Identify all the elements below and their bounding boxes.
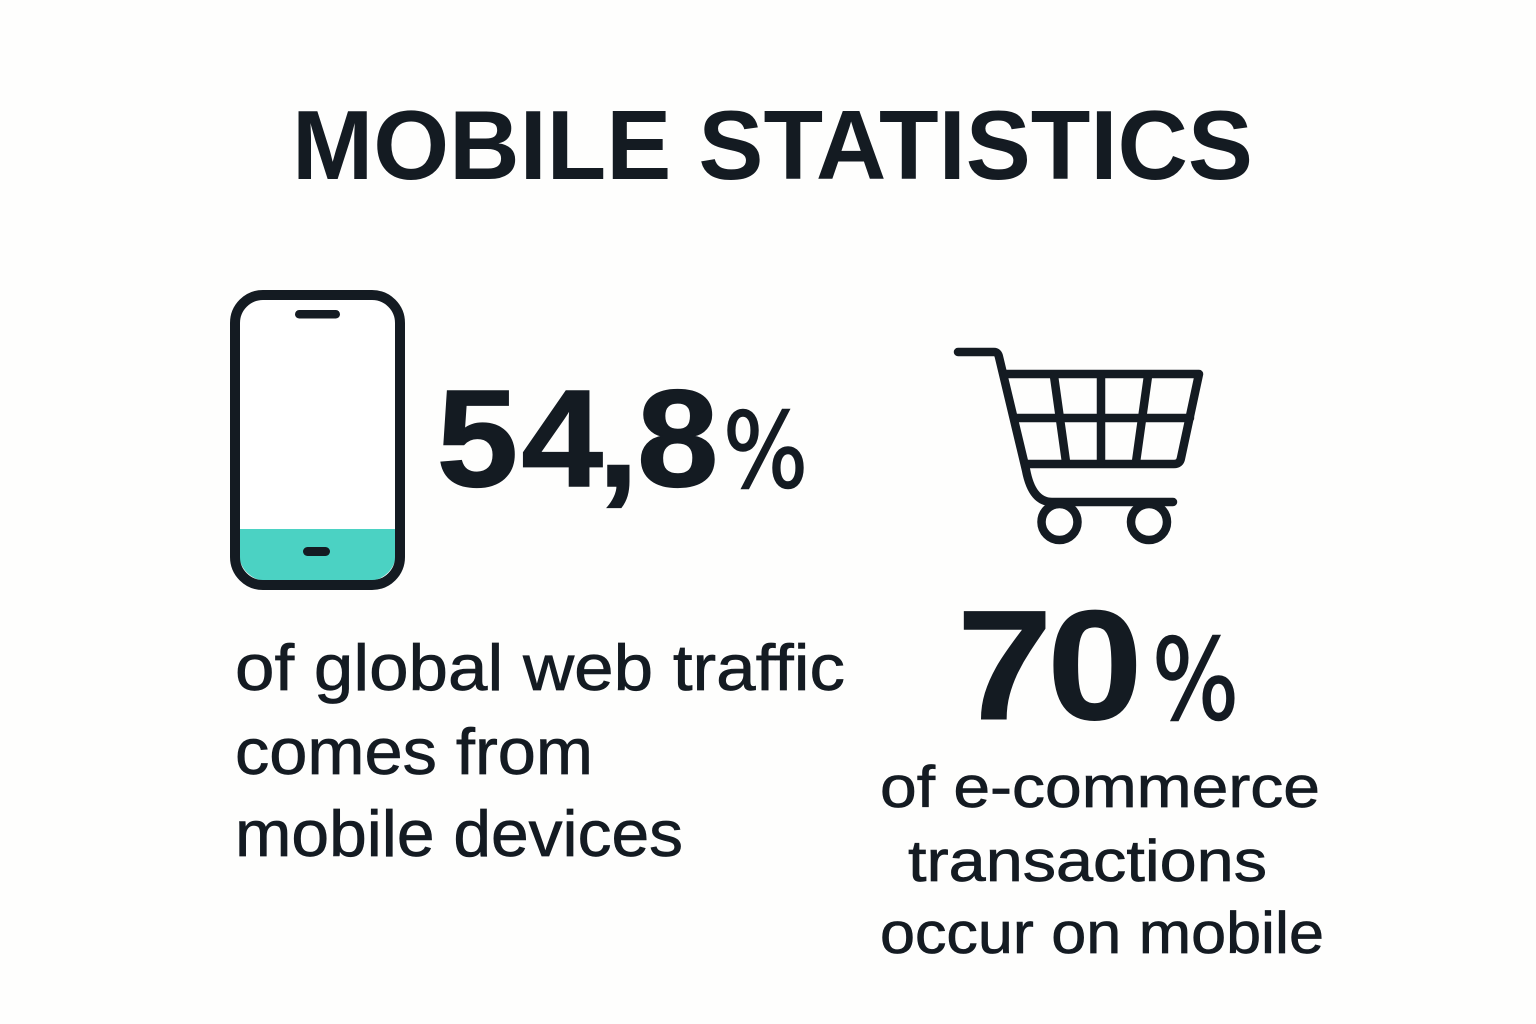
stat: 70% [957, 578, 1239, 752]
title: MOBILE STATISTICS [292, 90, 1253, 200]
stat: 54,8%: 54,8 [437, 362, 718, 516]
icon: shopping cart [958, 352, 1199, 540]
stat: 54,8%: % [723, 390, 808, 512]
stat: 70%: % [1152, 616, 1239, 746]
description: e-commerce transactions: transactions [908, 829, 1267, 894]
stat: 70%: 70 [957, 578, 1143, 752]
description: global web traffic: mobile devices [235, 797, 683, 870]
description: e-commerce transactions: of e-commerce [880, 755, 1320, 820]
icon: smartphone [235, 295, 400, 585]
description: e-commerce transactions [880, 755, 1324, 966]
panel: e-commerce transactions [880, 352, 1324, 966]
panel: global web traffic [235, 295, 845, 870]
description: global web traffic: of global web traffic [235, 631, 845, 704]
description: e-commerce transactions: occur on mobile [880, 901, 1324, 966]
description: global web traffic: comes from [235, 715, 593, 788]
description: global web traffic [235, 631, 845, 870]
